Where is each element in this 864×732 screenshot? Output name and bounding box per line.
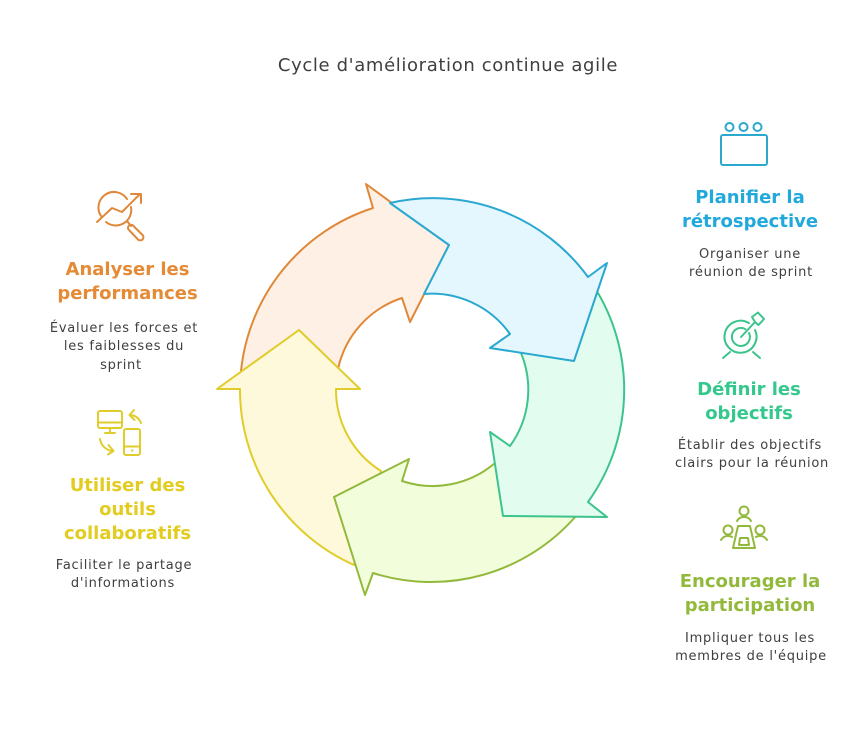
heading: Utiliser des	[70, 475, 185, 496]
panel: définir les objectifs	[675, 312, 829, 471]
cycle diagram	[217, 184, 624, 595]
panel: encourager la participation	[675, 506, 827, 664]
description: d'informations	[71, 576, 175, 591]
icon: magnifier with chart	[97, 192, 143, 240]
description: Impliquer tous les	[685, 631, 815, 646]
arrow: utiliser (yellow)	[217, 330, 381, 565]
arrow: planifier (blue)	[390, 198, 607, 361]
title: Cycle d'amélioration continue agile	[278, 55, 618, 76]
description: Organiser une	[699, 247, 801, 262]
description: sprint	[100, 358, 142, 373]
heading: objectifs	[705, 403, 793, 424]
heading: performances	[57, 283, 198, 304]
icon: devices sync	[98, 410, 141, 455]
icon: target	[723, 312, 764, 358]
heading: outils	[99, 499, 156, 520]
arrow: encourager (lime)	[334, 459, 576, 595]
heading: Définir les	[697, 379, 801, 400]
panel: planifier la rétrospective	[682, 123, 818, 280]
arrow: definir (green)	[490, 293, 624, 517]
heading: Encourager la	[680, 571, 820, 592]
description: Évaluer les forces et	[50, 320, 198, 336]
heading: collaboratifs	[64, 523, 191, 544]
description: Établir des objectifs	[678, 437, 822, 453]
description: membres de l'équipe	[675, 649, 827, 664]
description: les faiblesses du	[64, 339, 184, 354]
description: clairs pour la réunion	[675, 456, 829, 471]
icon: meeting	[721, 506, 767, 548]
heading: participation	[685, 595, 815, 616]
icon: calendar board	[721, 123, 767, 165]
description: réunion de sprint	[689, 265, 813, 280]
arrow: analyser (orange)	[241, 184, 449, 371]
heading: Analyser les	[66, 259, 189, 280]
description: Faciliter le partage	[56, 558, 192, 573]
heading: rétrospective	[682, 211, 818, 232]
panel: utiliser des outils collaboratifs	[56, 410, 192, 591]
heading: Planifier la	[695, 187, 805, 208]
panel: analyser les performances	[50, 192, 198, 373]
